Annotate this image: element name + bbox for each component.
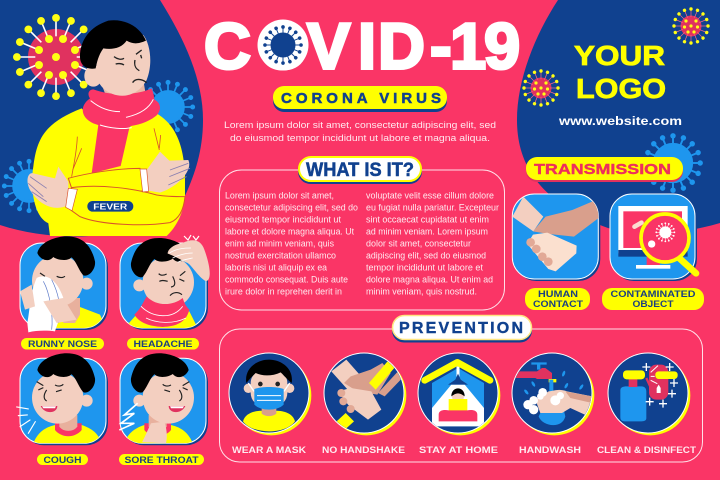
virus: large pink and yellow [13,14,99,100]
body text columns: minim veniam, quis nostrud. [366,286,477,296]
body text columns: nostrud exercitation ullamco [225,250,336,260]
icon: no handshake [324,353,406,438]
light arm [512,197,543,231]
icon: wear a mask [229,353,311,435]
body text columns: commodo consequat. Duis aute [225,274,348,284]
fever label [87,201,133,212]
prevention labels: NO HANDSHAKE [322,445,405,455]
logo text: LOGO [576,73,666,104]
cough marks [17,407,35,433]
card: human contact [512,194,600,281]
icon: stay at home [418,353,500,435]
body text columns: tempor incididunt ut labore et [366,262,483,272]
symptom: cough [17,353,108,445]
subtitle pill: CORONA VIRUS [281,90,441,107]
label: contaminated object: OBJECT [632,299,674,309]
virus: sky behind transmission [643,133,703,193]
body text columns: ad minim veniam. Lorem ipsum [366,226,488,236]
prevention labels: HANDWASH [519,445,581,455]
label: headache [127,338,199,350]
spray lines [651,366,658,384]
germs [648,226,671,248]
face details [37,382,63,401]
prevention labels: WEAR A MASK [232,445,307,455]
transmission heading [526,157,683,182]
label: cough [37,454,88,465]
sparkles [642,363,678,408]
symptom: runny nose [20,236,108,332]
label: contaminated object: CONTAMINATED [610,289,696,299]
face details [114,50,147,83]
scarf folds [91,99,153,128]
body text columns: consectetur adipiscing elit, sed do [225,202,358,212]
website: www.website.com [558,114,682,128]
sweater creases [72,128,161,177]
fingers [526,238,553,266]
logo text: YOUR [574,40,665,71]
heading pill [392,316,532,342]
label: sore throat [119,454,204,465]
body text columns: enim ad minim veniam, quis [225,238,334,248]
left blue blob [0,0,203,236]
fever label: FEVER [93,202,128,211]
neck [100,80,147,107]
open mouth [169,406,185,412]
face [96,30,150,96]
body text columns: eu fugiat nulla pariatur. Excepteur [366,202,499,212]
virus: beside logo [522,69,560,107]
card: contaminated object [610,194,697,281]
ear [84,65,102,87]
lower forearm [68,186,185,225]
label: human contact: HUMAN [538,289,578,299]
transmission heading: TRANSMISSION [534,161,671,178]
magnifier [641,214,696,273]
scarf wrap [83,88,160,127]
scarf [134,296,189,327]
open mouth [41,406,57,412]
water and drops [538,412,566,426]
scarf tail [92,125,130,173]
sweater body [32,108,185,236]
label: cough: COUGH [44,455,82,465]
prevention labels [232,445,697,455]
logo text [574,40,666,104]
face details [163,382,189,401]
body text columns: Lorem ipsum dolor sit amet, [225,190,334,200]
arm and hand [536,390,592,415]
body text columns: dolore magna aliqua. Ut enim ad [366,274,493,284]
icon: clean and disinfect [608,353,690,435]
body text columns: labore et dolore magna aliqua. Ut [225,226,354,236]
hand on forehead [168,240,210,281]
monitor [618,206,688,253]
face details [40,273,65,280]
prevention labels: STAY AT HOME [419,445,498,455]
virus: title letter O [258,20,308,70]
sky bottle [620,386,646,421]
left hand [28,167,68,208]
tissue [27,276,65,332]
virus: sky right of man [141,80,195,134]
pain marks [119,403,138,430]
right blue blob [517,0,720,233]
ache marks [184,235,199,240]
label: runny nose [21,338,104,350]
faucet [516,368,552,379]
label: human contact: CONTACT [533,299,584,309]
body text columns: eiusmod tempor incididunt ut [225,214,342,224]
icon: handwash [510,353,594,435]
body text columns: dolor sit amet, consectetur [366,238,471,248]
finger lines [28,163,190,202]
body text columns: adipiscing elit, sed do eiusmod [366,250,486,260]
body text columns: voluptate velit esse cillum dolore [366,190,494,200]
symptom: headache [120,238,210,330]
hair [80,20,146,69]
label: contaminated object [602,288,704,310]
label: headache: HEADACHE [134,339,192,349]
hands [20,285,77,323]
dark arm [533,199,600,237]
heading pill: PREVENTION [399,320,523,337]
virus: sky left of man [2,159,56,213]
body text columns: laboris nisi ut aliquip ex ea [225,262,327,272]
intro text: do eiusmod tempor incididunt ut labore et magna aliqua. [230,133,490,143]
upper forearm [68,168,148,194]
body text columns: sint occaecat cupidatat ut enim [366,214,489,224]
label: human contact [525,288,590,310]
hand on throat [142,422,167,443]
body text columns [225,190,499,296]
label: sore throat: SORE THROAT [124,455,199,465]
panel: what is it [220,157,504,310]
right hand [147,152,189,193]
body text columns: irure dolor in reprehen derit in [225,286,342,296]
foam [523,388,564,414]
title: COVID-19 [204,10,520,82]
label: runny nose: RUNNY NOSE [28,339,97,349]
subtitle pill [273,86,447,112]
clasped hand [527,233,577,271]
face details [159,271,185,296]
intro text: Lorem ipsum dolor sit amet, consectetur adipiscing elit, sed [224,120,496,130]
virus: top right [672,7,710,45]
intro text [224,120,496,143]
panel: prevention [220,316,702,462]
cuffs [66,169,149,211]
heading pill: WHAT IS IT? [306,160,414,181]
prevention labels: CLEAN & DISINFECT [597,445,697,455]
red bottle [649,365,668,400]
man with fever [28,20,190,236]
symptom: sore throat [119,353,208,445]
